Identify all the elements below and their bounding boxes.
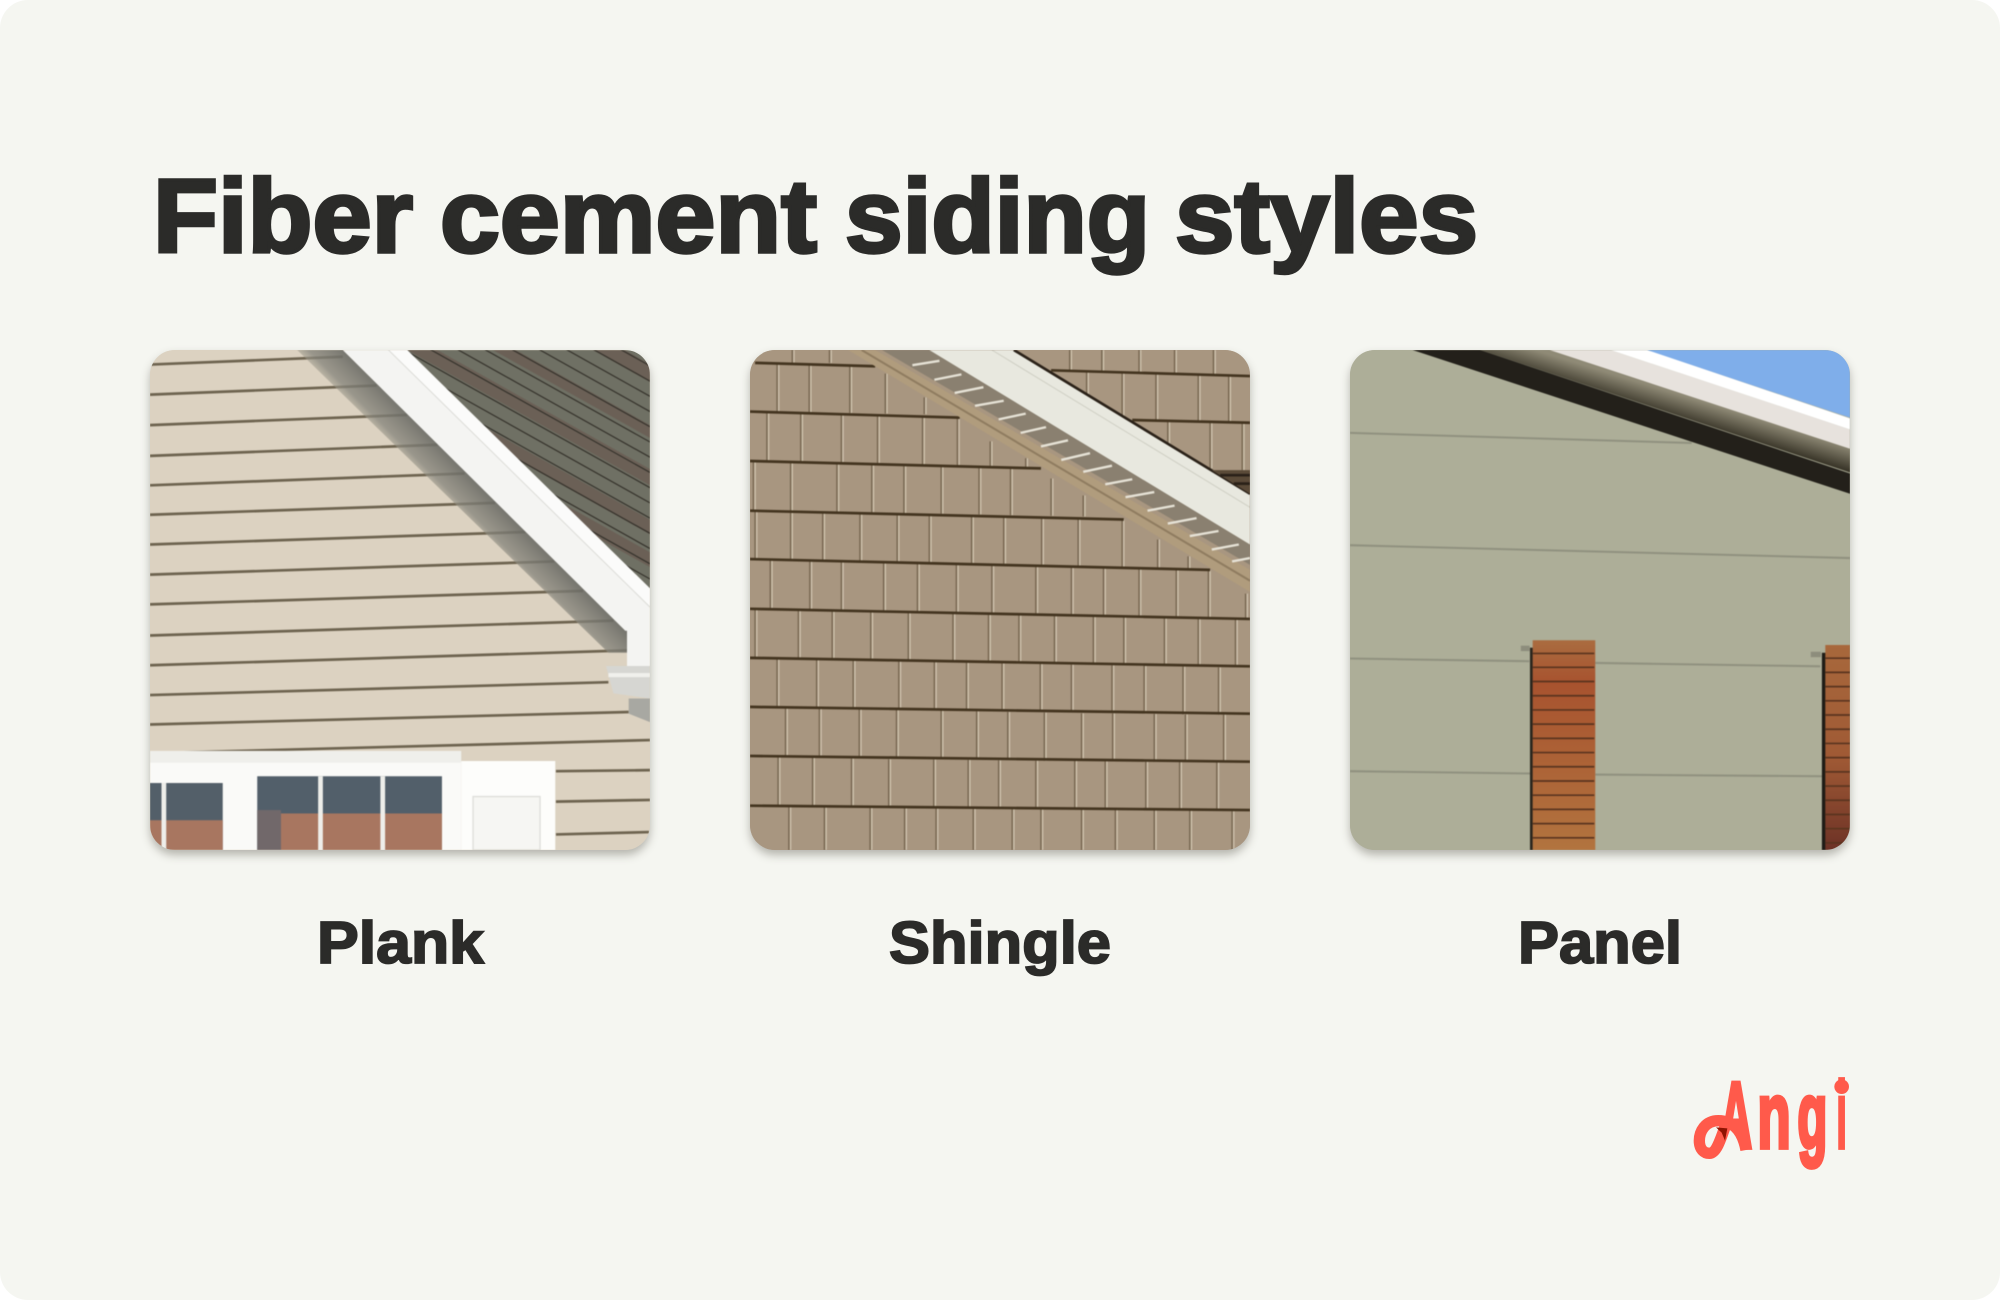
- title: styles: [1175, 159, 1478, 275]
- white fascia: [929, 350, 1250, 545]
- panel: shingle photo: [750, 350, 1250, 850]
- label: Panel: Panel: [1518, 910, 1682, 976]
- title: cement: [440, 159, 817, 275]
- logo: Angi: i: [1837, 1063, 1847, 1168]
- title: [153, 159, 1478, 276]
- panel: plank photo: [150, 350, 650, 850]
- label: Plank: Plank: [317, 910, 484, 976]
- title: Fiber: [153, 159, 413, 275]
- timber column 1: [1521, 640, 1595, 850]
- gable shadow: [297, 350, 627, 653]
- label: Shingle: Shingle: [889, 910, 1111, 976]
- roof edge shadow: [1014, 350, 1250, 494]
- logo: Angi: [1694, 1063, 1849, 1170]
- roof shingles: [407, 350, 650, 588]
- window and shutter: [150, 751, 555, 850]
- logo: Angi: g: [1797, 1063, 1827, 1168]
- rake trim: [343, 350, 650, 631]
- panel: panel siding photo: [1350, 350, 1850, 850]
- plank siding courses: [150, 357, 650, 834]
- shingle joints: [755, 350, 1247, 850]
- logo: Angi: n: [1757, 1063, 1791, 1168]
- timber column 2: [1811, 645, 1850, 850]
- sky: [1646, 350, 1850, 418]
- panel joints: [1350, 433, 1850, 776]
- soffit vents: [882, 350, 1250, 565]
- fascia: [1550, 350, 1850, 449]
- roof shadow band: [1413, 350, 1850, 494]
- gutter return: [606, 630, 650, 722]
- logo: Angi: A: [1720, 1063, 1752, 1168]
- title: siding: [845, 159, 1150, 275]
- shingle course lines: [750, 363, 1250, 810]
- shingle joint shadows: [753, 350, 1246, 850]
- soffit: [1480, 350, 1850, 472]
- rake trim band: [848, 350, 1250, 592]
